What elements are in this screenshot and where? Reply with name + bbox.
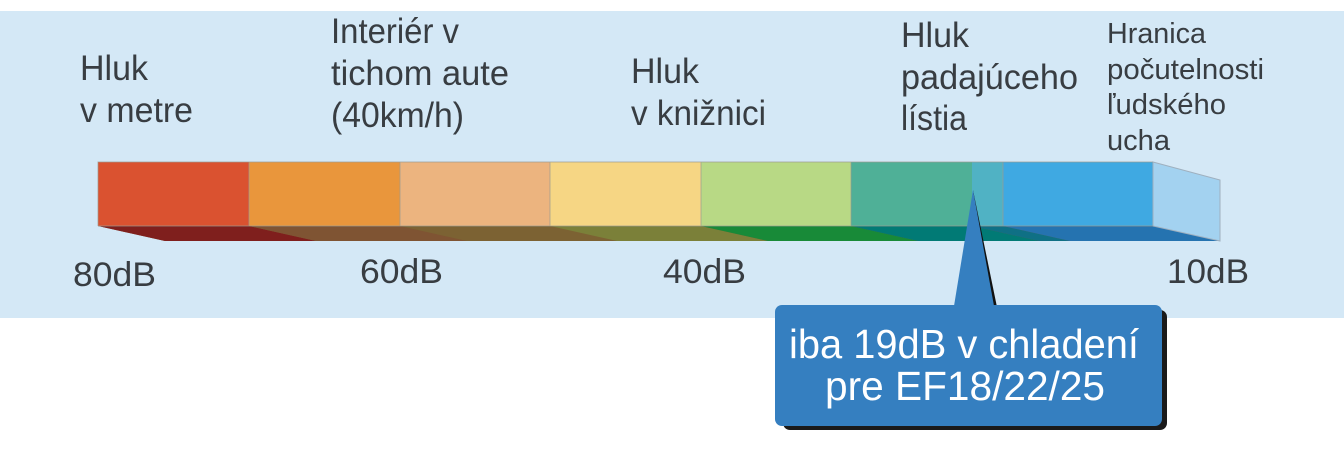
label: Hluk v metre: v metre <box>80 91 193 130</box>
label: Interiér v tichom aute <box>331 12 509 135</box>
callout text: pre EF18/22/25 <box>825 363 1105 409</box>
label: Hluk v metre <box>80 49 193 130</box>
panel: background <box>0 11 1344 318</box>
label: Hluk padajúceho lístia <box>901 16 1078 138</box>
chart: noise scale bar <box>98 162 1220 241</box>
label: Hluk v knižnici: v knižnici <box>631 94 766 133</box>
bar segment: orange <box>249 162 400 226</box>
label: Hluk v knižnici: Hluk <box>631 52 699 91</box>
bar segment: light green <box>701 162 851 226</box>
bar segment: yellow <box>550 162 701 226</box>
bar segment: teal 19dB <box>972 162 1003 226</box>
bar segment: light orange <box>400 162 550 226</box>
bar segment: blue <box>1003 162 1153 226</box>
bar underside <box>98 226 1220 241</box>
label: 80dB: 80dB <box>73 256 156 294</box>
callout: 19dB in cooling <box>775 190 1167 430</box>
bar end face: 10dB <box>1153 162 1220 241</box>
label: Hranica počutelnosti ľudského ucha <box>1107 18 1264 157</box>
label: Interiér v tichom aute: (40km/h) <box>331 96 464 135</box>
label: Hranica počutelnosti ľudského ucha: počutelnosti <box>1107 54 1264 86</box>
label: Hranica počutelnosti ľudského ucha: Hranica <box>1107 18 1207 50</box>
label: 60dB: 60dB <box>360 253 443 291</box>
callout text: iba 19dB v chladení <box>789 321 1140 367</box>
label: 10dB: 10dB <box>1167 253 1249 291</box>
label: Hranica počutelnosti ľudského ucha: ucha <box>1107 125 1171 157</box>
label: Interiér v tichom aute: Interiér v <box>331 12 459 51</box>
label: 40dB: 40dB <box>663 253 746 291</box>
label: Hluk padajúceho lístia: lístia <box>901 99 967 138</box>
label: Hluk v knižnici <box>631 52 766 133</box>
callout text <box>789 321 1140 409</box>
label: Hluk padajúceho lístia: padajúceho <box>901 58 1078 97</box>
label: Hluk v metre: Hluk <box>80 49 148 88</box>
bar segment: green <box>851 162 972 226</box>
label: Hranica počutelnosti ľudského ucha: ľudského <box>1107 89 1226 121</box>
bar segment: 80dB red <box>98 162 249 226</box>
label: Hluk padajúceho lístia: Hluk <box>901 16 969 55</box>
label: Interiér v tichom aute: tichom aute <box>331 54 509 93</box>
